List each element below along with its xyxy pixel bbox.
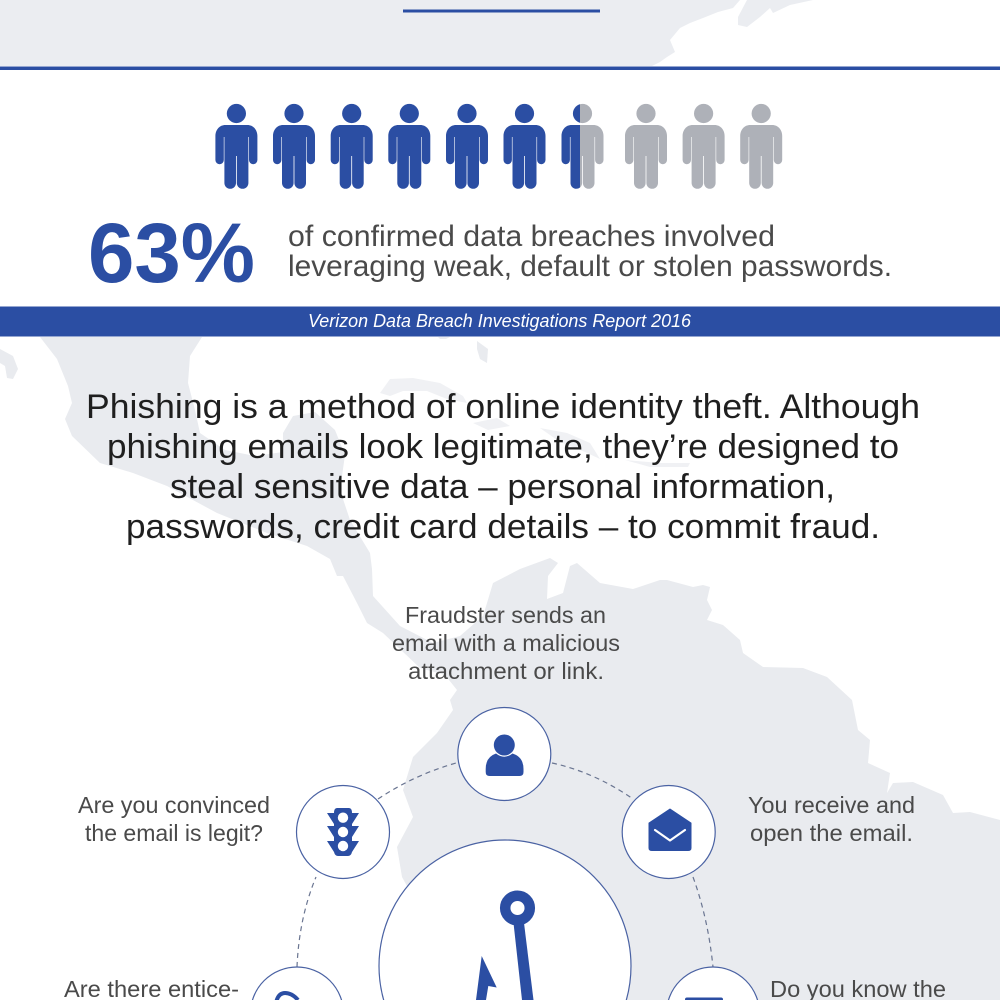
statistic description: leveraging weak, default or stolen passwords.	[288, 250, 892, 283]
label: convinced question: the email is legit?	[85, 820, 263, 846]
icon: open envelope	[649, 809, 691, 850]
label: step 2: You receive and	[748, 792, 915, 818]
source band	[0, 306, 1000, 336]
step circle: sender	[666, 967, 760, 1000]
world map background	[0, 337, 1000, 1000]
header rule	[403, 10, 600, 12]
label: step 1: email with a malicious	[392, 630, 620, 656]
intro paragraph: passwords, credit card details – to commit fraud.	[126, 508, 880, 546]
icon: fishing hook	[476, 896, 534, 1000]
step circle: receive email	[622, 786, 715, 878]
intro paragraph: Phishing is a method of online identity theft. Although	[86, 388, 920, 426]
label: step 1: Fraudster sends an	[405, 602, 606, 628]
step circle: convinced	[296, 786, 390, 878]
label: step 2	[748, 792, 915, 846]
intro paragraph: phishing emails look legitimate, they’re designed to	[107, 428, 899, 466]
icon: link	[276, 993, 298, 1000]
dashed cycle ring	[297, 763, 713, 967]
step circle: fraudster	[458, 708, 551, 800]
label: convinced question: Are you convinced	[78, 792, 270, 818]
centre circle with hook	[379, 840, 631, 1000]
label: convinced question	[78, 792, 270, 846]
statistic description	[288, 220, 892, 283]
label: step 1: attachment or link.	[408, 658, 604, 684]
statistic description: of confirmed data breaches involved	[288, 220, 775, 253]
icon: traffic light	[327, 808, 359, 856]
section divider	[0, 66, 1000, 70]
icon: document	[685, 998, 723, 1000]
label: step 1	[392, 602, 620, 684]
step circle: enticements	[250, 967, 344, 1000]
icon: person	[486, 734, 524, 776]
label: step 2: open the email.	[750, 820, 913, 846]
statistic: 63%: 63%	[88, 206, 255, 300]
source band: Verizon Data Breach Investigations Report 2016	[308, 311, 692, 331]
header map background	[0, 0, 813, 66]
intro paragraph	[86, 388, 920, 546]
intro paragraph: steal sensitive data – personal information,	[170, 468, 835, 506]
pictogram: ten people, 63 percent filled	[215, 104, 782, 189]
